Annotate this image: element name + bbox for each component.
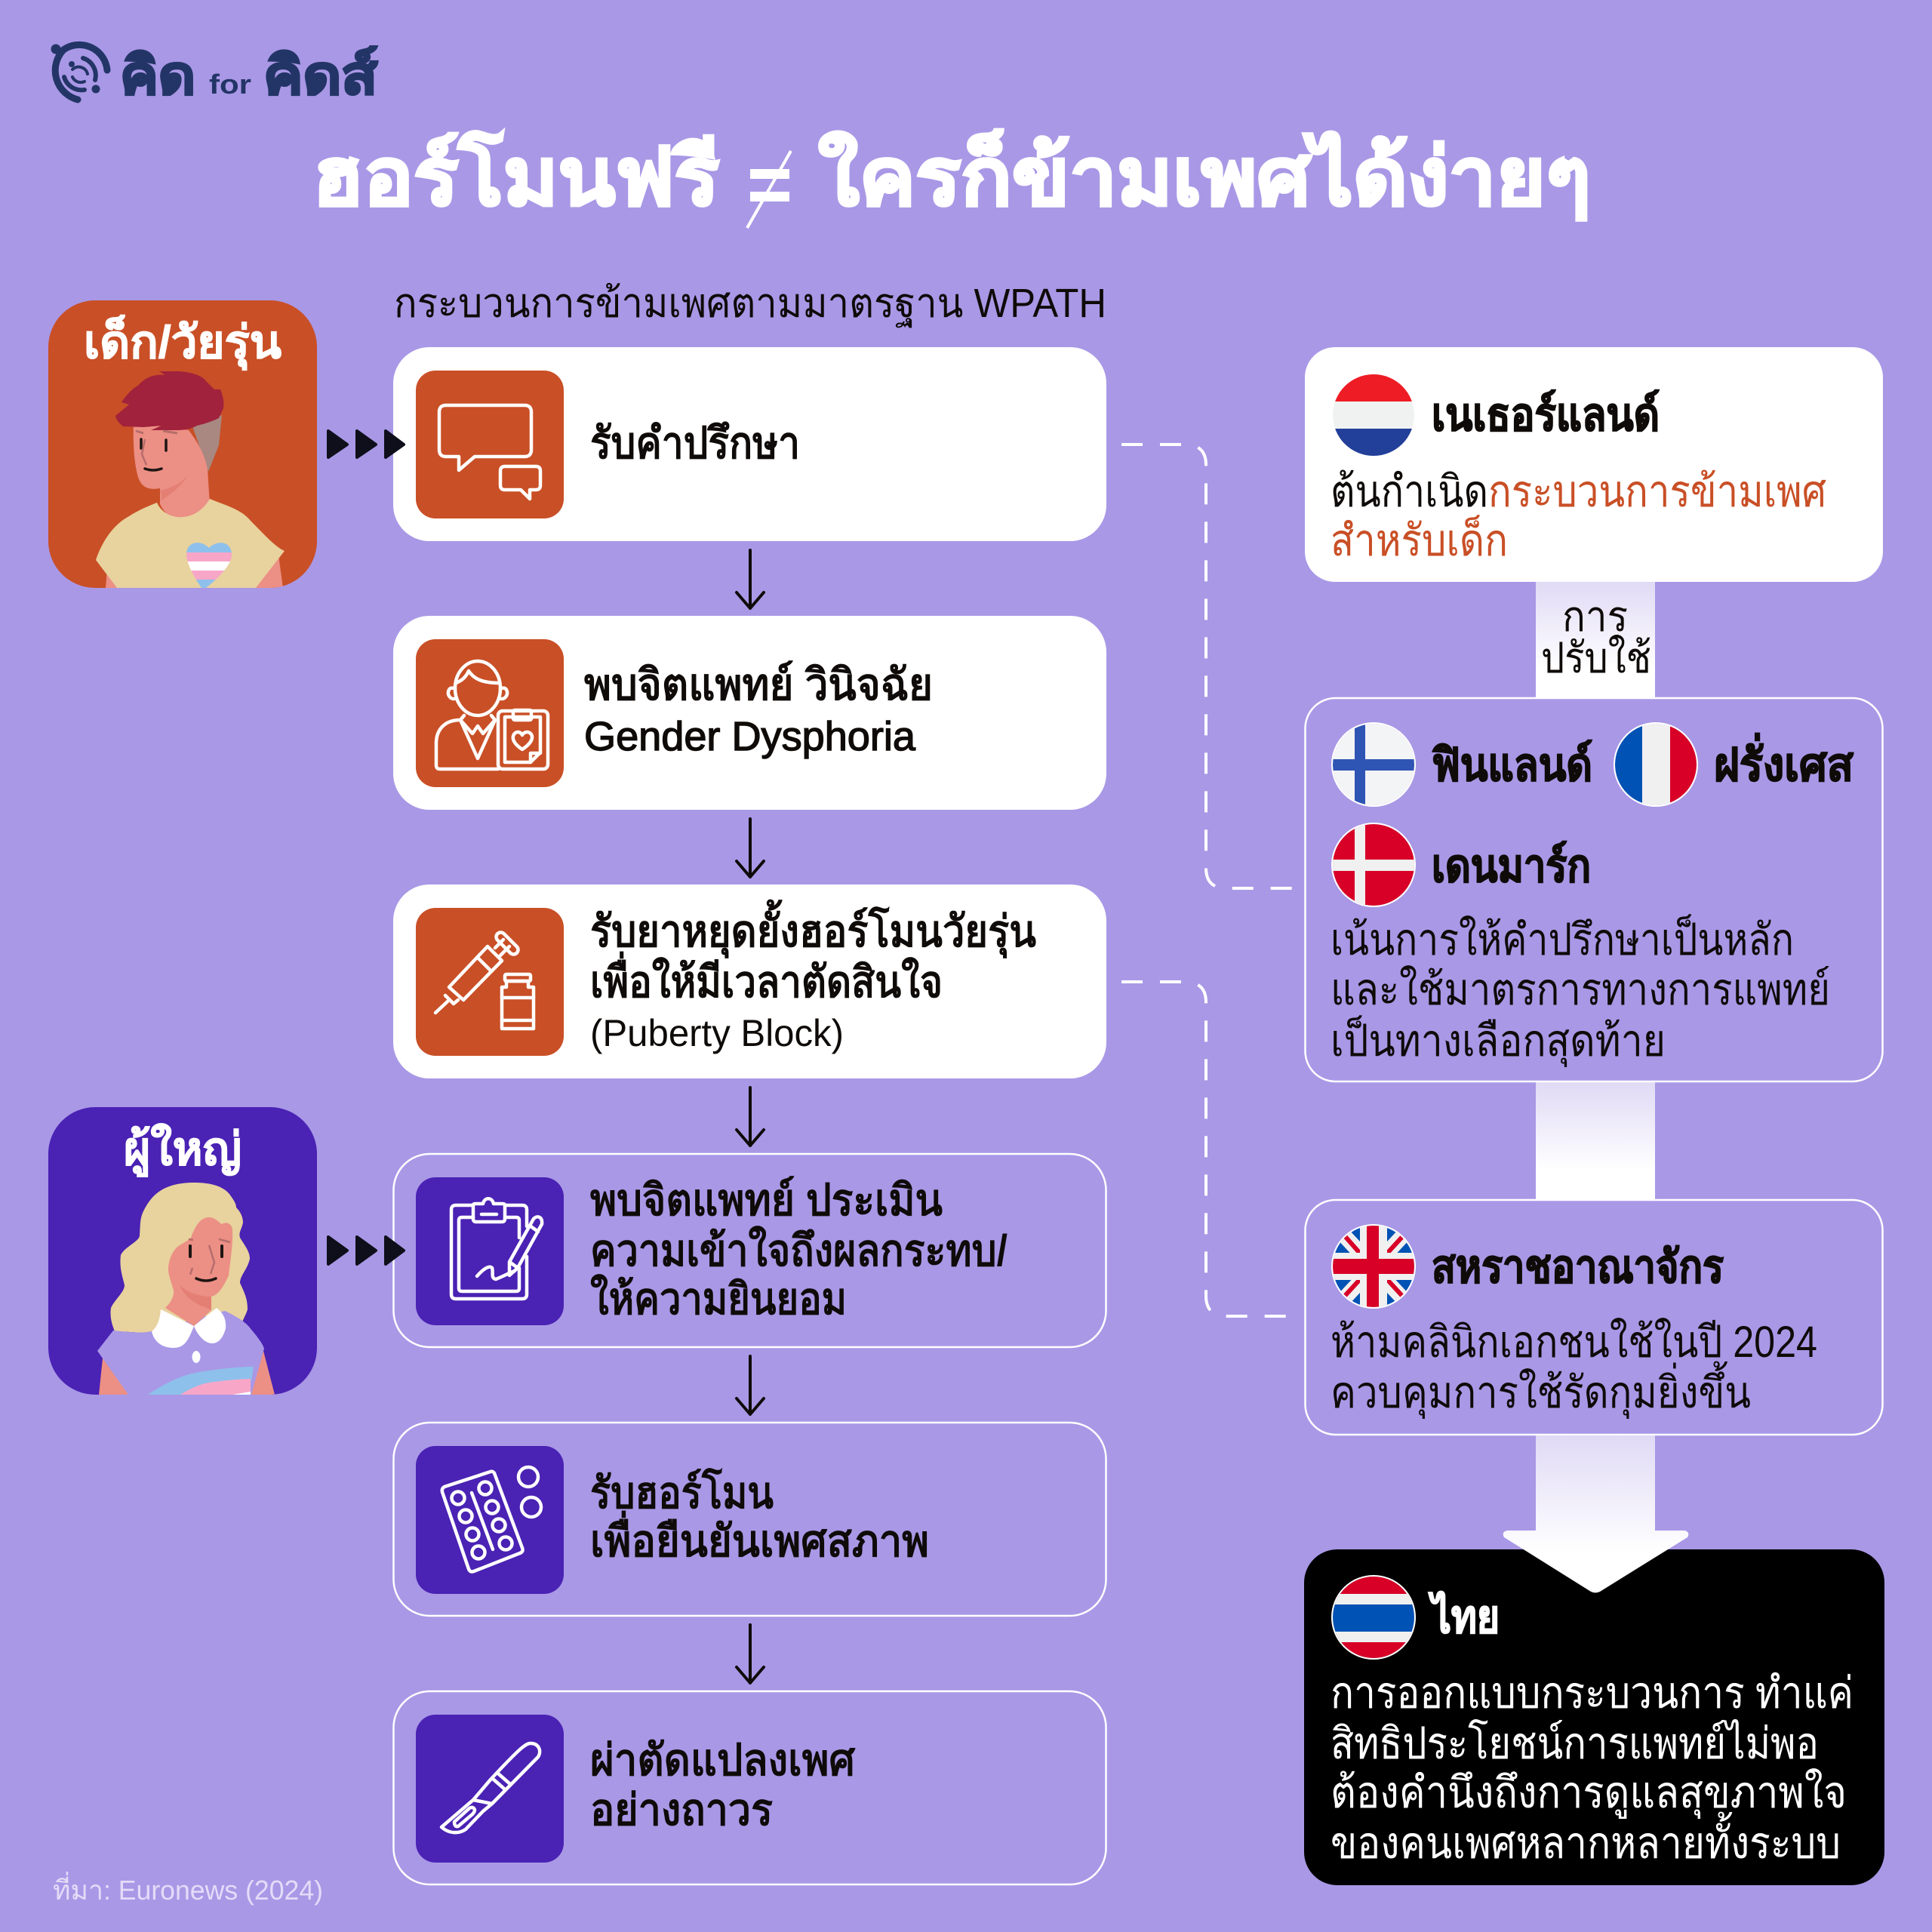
panel: Finland, France, Denmark: และใช้มาตรการทางการแพทย์ [1331, 964, 1830, 1014]
logo [51, 44, 377, 105]
title: ใครก็ข้ามเพศได้ง่ายๆ [818, 129, 1591, 222]
flag: Thailand [1331, 1575, 1416, 1660]
panel: step 3 puberty block [393, 884, 1106, 1078]
panel: step 1 counselling: รับคำปรึกษา [590, 419, 800, 468]
panel: step 2 psychiatrist: Gender Dysphoria [584, 714, 916, 759]
icon: clipboard and pen [451, 1198, 542, 1299]
connector: adaptation band [1536, 582, 1655, 698]
arrow: adult to step 4 [328, 1237, 404, 1264]
panel: Thailand: ไทย [1428, 1590, 1500, 1642]
panel: step 3 puberty block: รับยาหยุดยั้งฮอร์โมนวัยรุ่น [590, 900, 1036, 959]
logo: for [209, 69, 251, 100]
panel: Netherlands: เนเธอร์แลนด์ [1432, 389, 1660, 440]
panel: step 1 counselling [393, 347, 1106, 541]
panel: adult: ผู้ใหญ่ [124, 1123, 242, 1177]
illustration: teen with trans heart shirt [96, 371, 285, 590]
panel: step 6 surgery: ผ่าตัดแปลงเพศ [590, 1736, 856, 1785]
icon: pill blister [442, 1467, 541, 1572]
arrow: step 3 to 4 [737, 1088, 764, 1146]
flag: Finland [1331, 722, 1416, 807]
panel: Thailand [1304, 1549, 1884, 1885]
panel: step 2 psychiatrist [393, 616, 1106, 810]
connector: dashed step 3 to UK [1121, 982, 1292, 1316]
logo: คิดส์ [263, 46, 377, 105]
flag: Netherlands [1333, 374, 1414, 456]
title [312, 129, 1591, 228]
panel: Finland, France, Denmark [1306, 698, 1882, 1081]
icon: scalpel [441, 1743, 540, 1832]
flag: UK [1331, 1224, 1416, 1309]
panel: step 4 assessment: พบจิตแพทย์ ประเมิน [590, 1175, 943, 1225]
panel: United Kingdom: ควบคุมการใช้รัดกุมยิ่งขึ้น [1331, 1361, 1751, 1420]
panel: child/teen: เด็ก/วัยรุ่น [84, 315, 281, 371]
panel: Thailand: การออกแบบกระบวนการ ทำแค่ [1331, 1669, 1854, 1718]
panel: step 5 hormones: เพื่อยืนยันเพศสภาพ [590, 1510, 929, 1566]
panel: step 4 assessment [394, 1154, 1106, 1347]
arrow: child to step 1 [328, 431, 404, 457]
panel: Thailand: ของคนเพศหลากหลายทั้งระบบ [1331, 1812, 1841, 1868]
panel: United Kingdom [1306, 1200, 1882, 1435]
connector: adaptation band: การ [1562, 592, 1628, 640]
panel: adult [48, 1107, 317, 1395]
arrow: step 2 to 3 [737, 819, 764, 877]
icon: chat bubbles [439, 405, 540, 499]
arrow: step 4 to 5 [737, 1356, 764, 1414]
panel: United Kingdom: สหราชอาณาจักร [1432, 1241, 1724, 1292]
panel: step 4 assessment: ความเข้าใจถึงผลกระทบ/ [590, 1225, 1008, 1275]
flag: France [1614, 722, 1698, 807]
panel: United Kingdom: ห้ามคลินิกเอกชนใช้ในปี 2024 [1331, 1317, 1817, 1367]
connector: Nordic to UK [1536, 1082, 1655, 1200]
panel: Thailand: ต้องคำนึงถึงการดูแลสุขภาพใจ [1331, 1767, 1847, 1820]
flag: Denmark [1331, 823, 1416, 907]
panel: Netherlands: สำหรับเด็ก [1331, 515, 1508, 565]
panel: Finland, France, Denmark: เป็นทางเลือกสุดท้าย [1331, 1015, 1666, 1068]
panel: Finland, France, Denmark: เดนมาร์ก [1432, 841, 1591, 891]
title: ฮอร์โมนฟรี [312, 131, 719, 222]
panel: child/teen [48, 300, 317, 590]
panel: Finland, France, Denmark: ฝรั่งเศส [1714, 733, 1854, 790]
panel: Thailand: สิทธิประโยชน์การแพทย์ไม่พอ [1331, 1718, 1819, 1768]
panel: Netherlands: ต้นกำเนิด [1331, 467, 1488, 516]
panel: step 3 puberty block: (Puberty Block) [590, 1012, 844, 1054]
panel: step 3 puberty block: เพื่อให้มีเวลาตัดสินใจ [590, 951, 943, 1007]
logo: คิด [120, 46, 195, 105]
panel: step 6 surgery [394, 1691, 1106, 1884]
arrow: step 5 to 6 [737, 1625, 764, 1683]
connector: adaptation band: ปรับใช้ [1541, 634, 1651, 681]
panel: step 6 surgery: อย่างถาวร [590, 1786, 773, 1835]
icon: syringe and vial [435, 931, 534, 1029]
illustration: adult woman [97, 1183, 275, 1395]
panel: Netherlands: กระบวนการข้ามเพศ [1488, 467, 1826, 516]
icon: doctor with clipboard [436, 661, 548, 769]
source note: ที่มา: Euronews (2024) [53, 1872, 323, 1906]
panel: step 4 assessment: ให้ความยินยอม [590, 1273, 847, 1324]
arrow: step 1 to 2 [737, 550, 764, 608]
panel: Finland, France, Denmark: ฟินแลนด์ [1432, 740, 1592, 790]
panel: Finland, France, Denmark: เน้นการให้คำปรึกษาเป็นหลัก [1331, 914, 1794, 964]
panel: step 5 hormones: รับฮอร์โมน [590, 1466, 774, 1518]
panel: step 2 psychiatrist: พบจิตแพทย์ วินิจฉัย [584, 660, 933, 709]
subheading: WPATH process: กระบวนการข้ามเพศตามมาตรฐาน WPATH [394, 281, 1106, 328]
panel: Netherlands [1305, 347, 1883, 582]
connector: dashed step 1 to Nordic [1121, 445, 1292, 888]
arrow: UK to Thailand [1503, 1435, 1688, 1592]
panel: step 5 hormones [394, 1423, 1106, 1616]
